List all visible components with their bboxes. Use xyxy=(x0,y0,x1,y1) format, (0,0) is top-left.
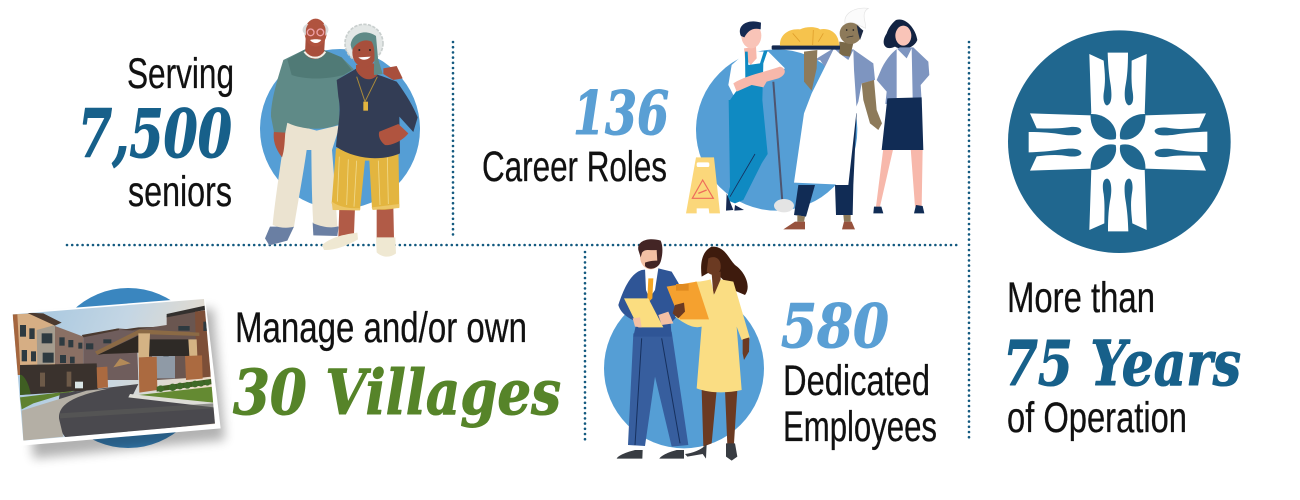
stat: 580 dedicated employees: 580 xyxy=(781,292,889,362)
stat: more than 75 years of operation: 75 Years xyxy=(1003,327,1241,400)
illustration: senior couple xyxy=(260,19,420,257)
woman xyxy=(322,24,418,257)
stat: 580 dedicated employees xyxy=(781,292,937,451)
dotted dividers xyxy=(67,42,969,442)
maintenance worker xyxy=(726,21,794,212)
stat: more than 75 years of operation xyxy=(1003,274,1241,442)
stat: 580 dedicated employees: Dedicated xyxy=(783,357,930,405)
illustration: staff roles xyxy=(686,8,929,229)
stat: 580 dedicated employees: Employees xyxy=(783,403,937,451)
man xyxy=(265,19,354,245)
stat: serving 7,500 seniors: Serving xyxy=(127,50,234,98)
professional woman xyxy=(873,19,929,213)
caution sign xyxy=(686,157,720,213)
stat: more than 75 years of operation: of Operation xyxy=(1007,394,1187,442)
stat: serving 7,500 seniors xyxy=(78,50,234,216)
photo: village building xyxy=(10,288,225,458)
stat: manage and/or own 30 villages xyxy=(233,304,561,429)
man in suit xyxy=(617,239,688,459)
chef xyxy=(772,8,882,229)
stat: manage and/or own 30 villages: 30 Villages xyxy=(233,356,561,429)
stat: serving 7,500 seniors: 7,500 xyxy=(78,95,232,173)
stat: more than 75 years of operation: More than xyxy=(1007,274,1155,322)
center flower xyxy=(1091,114,1145,170)
stat: 136 career roles: Career Roles xyxy=(482,143,667,191)
stat: serving 7,500 seniors: seniors xyxy=(128,168,232,216)
logo: blue circle with white cross xyxy=(1008,30,1231,253)
illustration: business employees xyxy=(604,239,764,461)
woman in yellow dress xyxy=(667,247,750,461)
stat: 136 career roles xyxy=(482,79,669,191)
cross arms xyxy=(1029,53,1207,231)
stat: manage and/or own 30 villages: Manage and/or own xyxy=(235,304,527,352)
stat: 136 career roles: 136 xyxy=(573,79,669,149)
